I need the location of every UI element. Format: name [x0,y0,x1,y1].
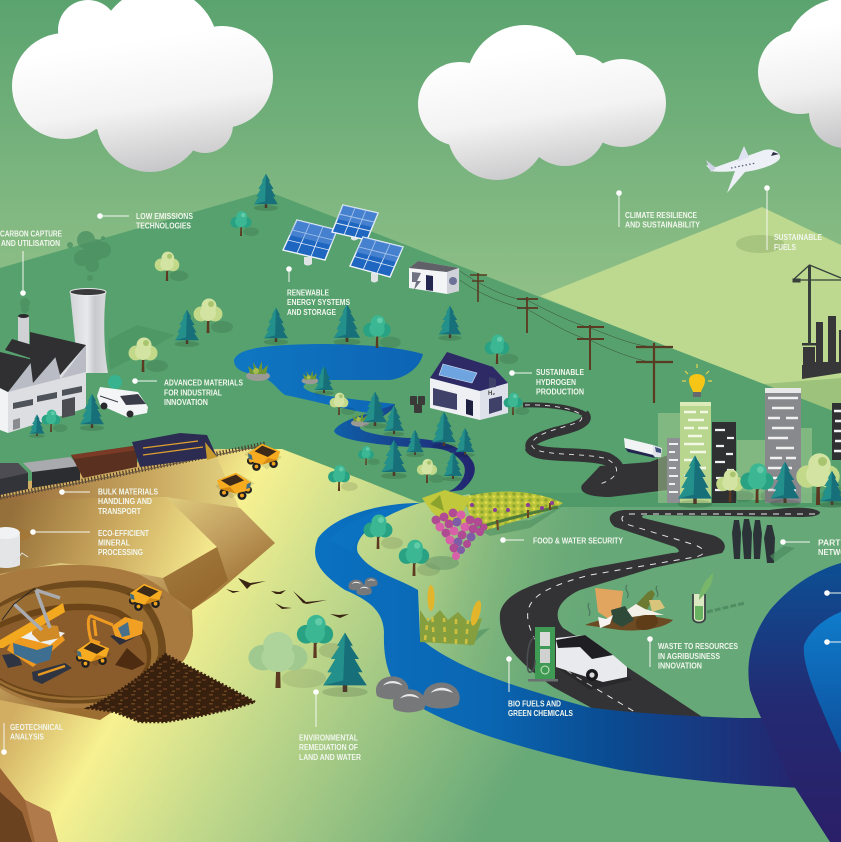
river [315,503,800,788]
label: carbon capture and utilisation: AND UTILISATION [1,239,60,248]
shadow under grapes [425,556,459,570]
label: climate resilience: AND SUSTAINABILITY [625,220,701,230]
cobs [428,585,434,611]
green tower [680,402,711,503]
dirt mound [115,648,145,670]
label: environmental remediation: ENVIRONMENTAL [299,734,358,742]
vines [463,491,563,530]
label: waste to resources: WASTE TO RESOURCES [658,642,739,651]
waste pile [585,585,673,631]
mine ground: cliff [163,547,228,610]
leaves [420,610,482,645]
label: bulk materials [59,488,159,516]
grapes [432,508,488,560]
test tube sprout [693,573,745,622]
label: eco-efficient mineral processing: PROCESSING [98,548,143,557]
label: renewable energy systems and storage [286,266,351,317]
lower road [500,508,820,720]
hopper wagon [23,457,80,488]
label: bio fuels and green chemicals [506,656,574,718]
right black tower [832,403,841,460]
barrels [410,396,425,413]
background: far light hill [540,207,841,420]
label: geotechnical analysis: GEOTECHNICAL [10,723,63,732]
power lines [460,271,673,403]
label: environmental remediation: LAND AND WATER [299,753,361,762]
crane platform [802,343,816,346]
hydrogen mark: H₂ [488,391,495,397]
black tower [712,422,736,503]
upper road [523,405,668,497]
label: bio fuels and green chemicals: GREEN CHEMICALS [508,709,574,718]
label: climate resilience [616,190,701,230]
people shadow [770,546,795,562]
mid hill [0,191,841,503]
label: sustainable fuels [764,185,823,252]
vineyard [422,490,563,536]
can [611,606,634,627]
grey left tower [667,438,680,503]
panel 1 [283,220,337,260]
label: sustainable hydrogen production [509,368,585,396]
lower road dashes [528,514,815,718]
box [595,588,623,620]
label: renewable energy systems and storage: ENERGY SYSTEMS [287,298,351,307]
city buildings [658,388,841,503]
white wrapper [598,615,613,628]
open cut pit [0,565,193,708]
train and track [0,433,265,498]
lower darker band [470,493,841,507]
fish bone [627,604,664,617]
wall shading [8,345,86,392]
house [430,352,508,420]
row shadow [470,506,563,536]
windows [556,635,613,659]
land gradient ground [0,430,841,842]
front wall [430,378,480,420]
background: hill shadow near fuels label [736,235,784,253]
roof solar [439,364,477,383]
label: low emissions technologies: LOW EMISSIONS [136,212,194,221]
berries [470,501,554,512]
mine ground: outer rim [0,497,275,720]
corn field [420,585,490,646]
tree beside house [504,393,529,415]
smell lines [588,585,658,616]
car shadow [556,660,632,690]
label: waste to resources: INNOVATION [658,662,702,670]
label: eco-efficient mineral processing [30,529,149,557]
cloud right [758,0,841,148]
panel 2 [332,205,378,240]
windows [13,386,82,409]
callout marker: bay lower [824,639,841,645]
pole 1 [470,273,487,302]
boom [0,603,65,648]
bucket wheel excavator [0,588,72,684]
cloud middle [418,25,666,180]
stems [497,503,550,530]
stack [18,314,29,344]
label: sustainable hydrogen production: PRODUCTION [536,388,584,396]
label: advanced materials: INNOVATION [164,398,208,407]
label: advanced materials [132,378,244,407]
label: sustainable fuels: SUSTAINABLE [774,233,823,242]
crane [793,265,841,345]
dump trucks [73,444,282,668]
city trees [677,453,841,508]
coconut [636,613,658,630]
label: environmental remediation: REMEDIATION OF [299,743,358,752]
windows [433,377,502,416]
label: bio fuels and green chemicals: BIO FUELS AND [508,700,561,708]
label: low emissions technologies [97,212,194,230]
box wagon [71,446,137,478]
trees on the hill [29,174,518,483]
smoke: carbon emissions [20,231,111,313]
end wall [0,388,8,433]
delivery van [97,387,148,418]
door [62,397,75,418]
digger [88,616,143,645]
conifers [29,174,475,481]
label: sustainable fuels: FUELS [774,243,797,252]
label: advanced materials: FOR INDUSTRIAL [164,388,222,398]
label: sustainable hydrogen production: HYDROGEN [536,378,576,387]
label: bulk materials: HANDLING AND [98,497,152,506]
cooling tower [70,288,108,373]
bottom left rock [0,768,58,842]
tall grey tower [765,388,801,503]
reed islets [246,361,369,427]
coal wagon [0,463,28,495]
locomotive [132,433,217,467]
pole 3 [577,325,604,370]
trees on the plain [248,465,440,697]
label: advanced materials: ADVANCED MATERIALS [164,378,244,388]
hill shadow behind factory [108,325,175,370]
lake [234,344,423,413]
charging pump [527,627,558,682]
label: bulk materials: TRANSPORT [98,507,141,516]
label: bulk materials: BULK MATERIALS [98,488,159,496]
vent [13,418,20,430]
label: sustainable hydrogen production: SUSTAINABLE [536,368,585,377]
electric car [556,635,632,690]
bush behind van [108,375,122,389]
background: city hill [763,378,841,416]
bottle [630,590,655,614]
tracks [2,653,72,684]
label: partnership networks [780,538,841,557]
turret [32,623,60,642]
label: eco-efficient mineral processing: ECO-EFFICIENT [98,529,149,538]
bay outer navy [748,563,841,842]
label: geotechnical analysis: ANALYSIS [10,732,45,742]
solar panels [283,205,403,282]
refinery base [802,316,841,379]
body [7,625,65,667]
main wall [8,345,86,433]
mud [585,616,673,631]
body [556,635,627,682]
battery storage building [409,261,459,294]
pole 4 [636,343,673,403]
lower right field fade [430,500,841,730]
cloud left [12,0,273,172]
mine ground: top strip [0,458,240,510]
label: low emissions technologies: TECHNOLOGIES [136,222,192,230]
masts [14,590,60,630]
refinery and crane silhouette [793,265,841,379]
label: renewable energy systems and storage: AND STORAGE [287,308,337,317]
large leaves [422,490,470,525]
delivery truck [624,438,662,458]
river highlight edge [330,503,420,553]
label: eco-efficient mineral processing: MINERAL [98,538,130,548]
back translucent blocks [658,413,812,503]
label: climate resilience: CLIMATE RESILIENCE [625,211,698,220]
wheel [586,669,598,681]
aeroplane [706,146,780,193]
label: food and water security [500,536,624,546]
birds [226,578,349,618]
silhouette people [732,519,775,563]
silo [0,527,31,568]
bay inner blue [804,612,841,753]
corn shadow [465,628,490,646]
panel 3 [350,237,403,277]
pouch [649,600,665,612]
factory [0,288,108,433]
creek [334,404,475,492]
round teal trees [42,211,518,465]
round pale trees [128,252,444,483]
river rocks [349,578,460,712]
mine ground: inner plateau [0,497,217,578]
lightbulb [682,364,712,397]
label: renewable energy systems and storage: RENEWABLE [287,288,330,298]
pole 2 [517,297,538,333]
side wall [480,367,508,420]
callout marker: bay upper [824,590,841,596]
spoil heap [88,654,255,722]
label: waste to resources [647,636,739,670]
label: geotechnical analysis [1,723,63,755]
label: environmental remediation [299,689,361,762]
label: carbon capture and utilisation: CARBON CAPTURE [0,230,63,238]
roof [430,352,508,391]
label: food and water security: FOOD & WATER SECURITY [533,536,624,546]
roofs [0,332,86,392]
label: waste to resources: IN AGRIBUSINESS [658,652,721,661]
label: carbon capture and utilisation [0,230,63,296]
